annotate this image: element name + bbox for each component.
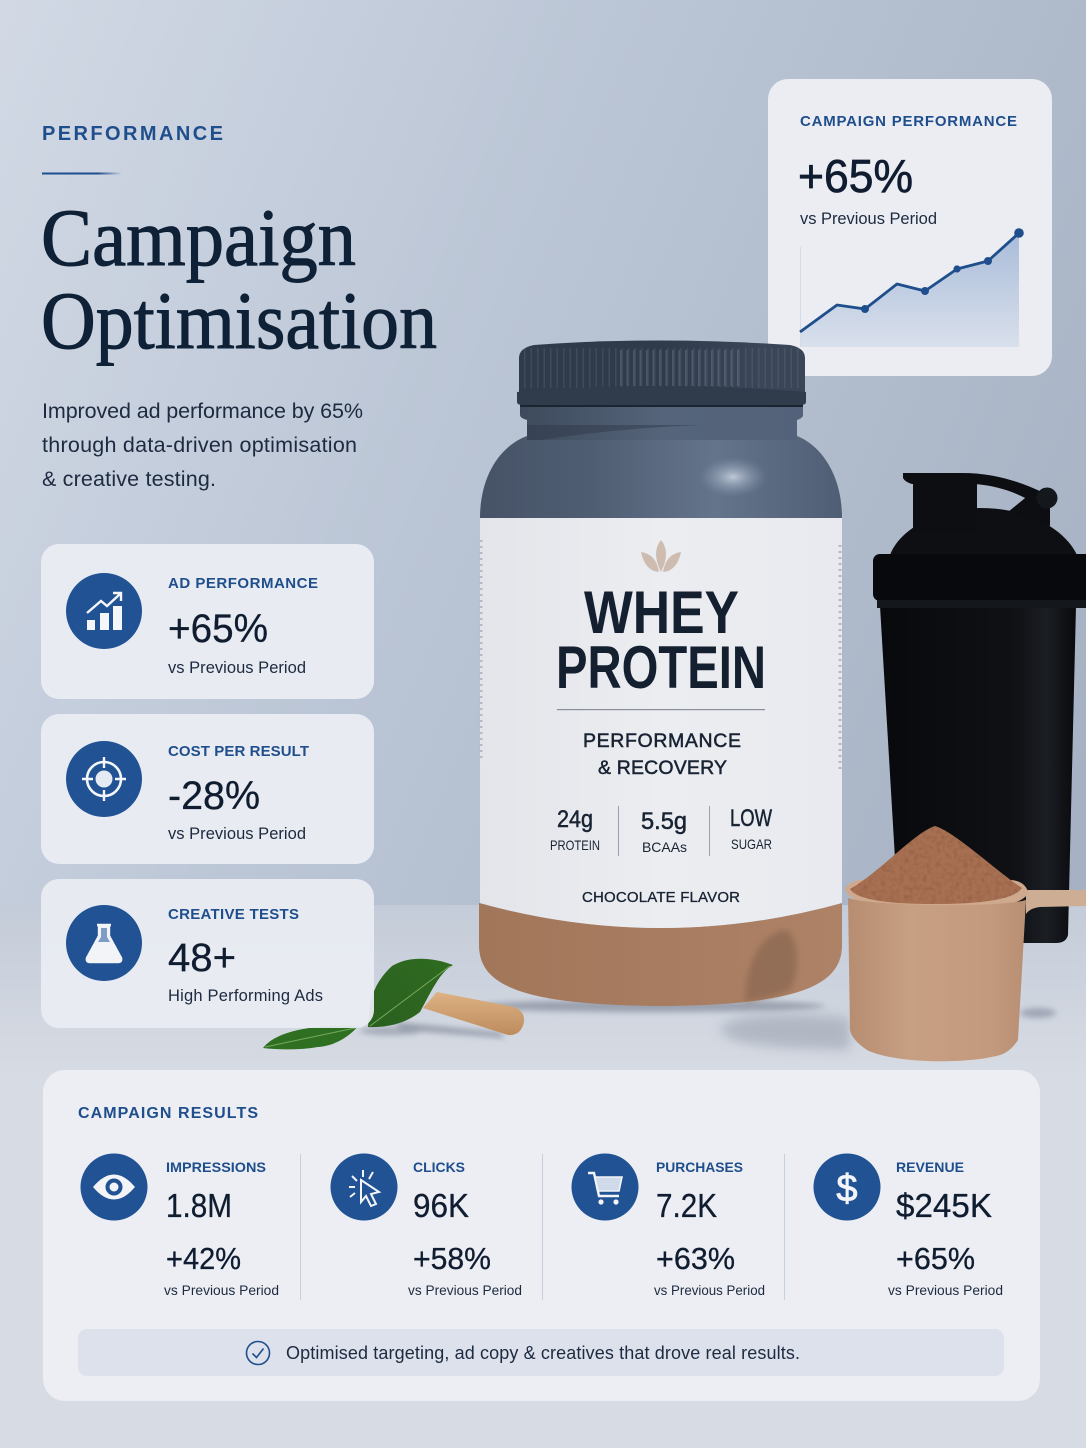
metric: revenue: REVENUE bbox=[896, 1159, 964, 1175]
nutrition stats bbox=[550, 805, 772, 856]
caption: vs Previous Period bbox=[168, 825, 306, 843]
callout banner bbox=[78, 1329, 1004, 1376]
metric: revenue: $245K bbox=[896, 1187, 992, 1224]
metric: +65%: +65% bbox=[168, 607, 268, 651]
metric: revenue bbox=[814, 1154, 1003, 1298]
icon: flask bbox=[66, 905, 142, 981]
flavor: CHOCOLATE FLAVOR bbox=[582, 889, 740, 906]
metric: clicks: CLICKS bbox=[413, 1159, 465, 1175]
nutrition stats: 5.5g bbox=[641, 808, 687, 835]
title bbox=[41, 192, 437, 366]
description: through data-driven optimisation bbox=[42, 433, 357, 457]
metric: purchases: 7.2K bbox=[656, 1187, 717, 1224]
illustration: shaker bottle bbox=[873, 473, 1086, 943]
title: Optimisation bbox=[41, 275, 437, 366]
icon: eye bbox=[80, 1154, 148, 1220]
tagline: & RECOVERY bbox=[598, 757, 727, 779]
caption: vs Previous Period bbox=[168, 659, 306, 677]
heading: campaign performance: CAMPAIGN PERFORMANCE bbox=[800, 113, 1017, 130]
metric: impressions: vs Previous Period bbox=[164, 1282, 279, 1298]
product name bbox=[556, 579, 766, 701]
metric: impressions bbox=[80, 1154, 279, 1298]
icon: dollar bbox=[814, 1154, 880, 1220]
label: cost per result: COST PER RESULT bbox=[168, 743, 309, 760]
metric: clicks: vs Previous Period bbox=[408, 1282, 522, 1298]
illustration: wooden stick bbox=[423, 992, 524, 1035]
nutrition stats: SUGAR bbox=[731, 836, 772, 852]
metric: clicks: +58% bbox=[413, 1241, 491, 1276]
description: & creative testing. bbox=[42, 467, 216, 491]
metric: revenue: vs Previous Period bbox=[888, 1282, 1003, 1298]
callout banner: Optimised targeting, ad copy & creatives that drove real results. bbox=[286, 1343, 800, 1363]
metric: -28%: -28% bbox=[168, 774, 260, 818]
icon: check bbox=[246, 1342, 270, 1364]
icon: cart bbox=[572, 1154, 638, 1220]
metric: impressions: IMPRESSIONS bbox=[166, 1159, 266, 1175]
jar shoulder bbox=[480, 436, 842, 518]
illustration: protein jar bbox=[479, 340, 842, 1006]
icon: growth chart bbox=[66, 573, 142, 649]
panel: cost per result card bbox=[41, 714, 374, 864]
panel: campaign results bbox=[43, 1070, 1040, 1401]
title: Campaign bbox=[41, 192, 356, 283]
icon: leaf logo bbox=[641, 540, 681, 572]
metric: purchases bbox=[572, 1154, 765, 1298]
illustration: green leaves bbox=[263, 959, 453, 1049]
accent rule bbox=[42, 172, 122, 174]
label: creative tests: CREATIVE TESTS bbox=[168, 906, 299, 923]
panel: ad performance card bbox=[41, 544, 374, 699]
metric: impressions: 1.8M bbox=[166, 1187, 232, 1224]
jar lid bbox=[517, 340, 806, 405]
metric: impressions: +42% bbox=[166, 1241, 241, 1276]
tagline bbox=[583, 730, 741, 779]
powder mound bbox=[850, 826, 1022, 904]
jar base bbox=[479, 903, 842, 1006]
product name: PROTEIN bbox=[556, 634, 766, 701]
jar neck bbox=[520, 405, 803, 440]
nutrition stats: 24g bbox=[557, 806, 593, 833]
icon: target bbox=[66, 741, 142, 817]
panel: creative tests card bbox=[41, 879, 374, 1028]
metric: clicks: 96K bbox=[413, 1187, 469, 1224]
illustration: scoop with powder bbox=[845, 826, 1086, 1061]
jar label bbox=[480, 518, 842, 928]
metric: +65%: +65% bbox=[798, 150, 913, 202]
metric: revenue: +65% bbox=[896, 1241, 975, 1276]
metric: 48+: 48+ bbox=[168, 936, 236, 980]
description: Improved ad performance by 65% bbox=[42, 399, 363, 423]
heading: campaign results: CAMPAIGN RESULTS bbox=[78, 1105, 258, 1122]
panel: campaign performance chart card bbox=[768, 79, 1052, 376]
icon: cursor bbox=[330, 1154, 398, 1220]
tagline: PERFORMANCE bbox=[583, 730, 741, 752]
nutrition stats: LOW bbox=[730, 805, 772, 832]
line chart bbox=[800, 228, 1024, 347]
caption: High Performing Ads bbox=[168, 987, 323, 1005]
metric: clicks bbox=[330, 1154, 522, 1298]
scene: floor shadows bbox=[360, 1000, 1056, 1050]
caption: vs previous period: vs Previous Period bbox=[800, 210, 937, 228]
description bbox=[42, 399, 363, 491]
metric: purchases: +63% bbox=[656, 1241, 735, 1276]
eyebrow: performance: PERFORMANCE bbox=[42, 123, 223, 145]
nutrition stats: BCAAs bbox=[642, 839, 687, 855]
icon: dollar: $ bbox=[836, 1168, 858, 1210]
product name: WHEY bbox=[584, 579, 739, 646]
metric: purchases: vs Previous Period bbox=[654, 1282, 765, 1298]
metric: purchases: PURCHASES bbox=[656, 1159, 743, 1175]
nutrition stats: PROTEIN bbox=[550, 837, 600, 853]
label: ad performance: AD PERFORMANCE bbox=[168, 575, 318, 592]
